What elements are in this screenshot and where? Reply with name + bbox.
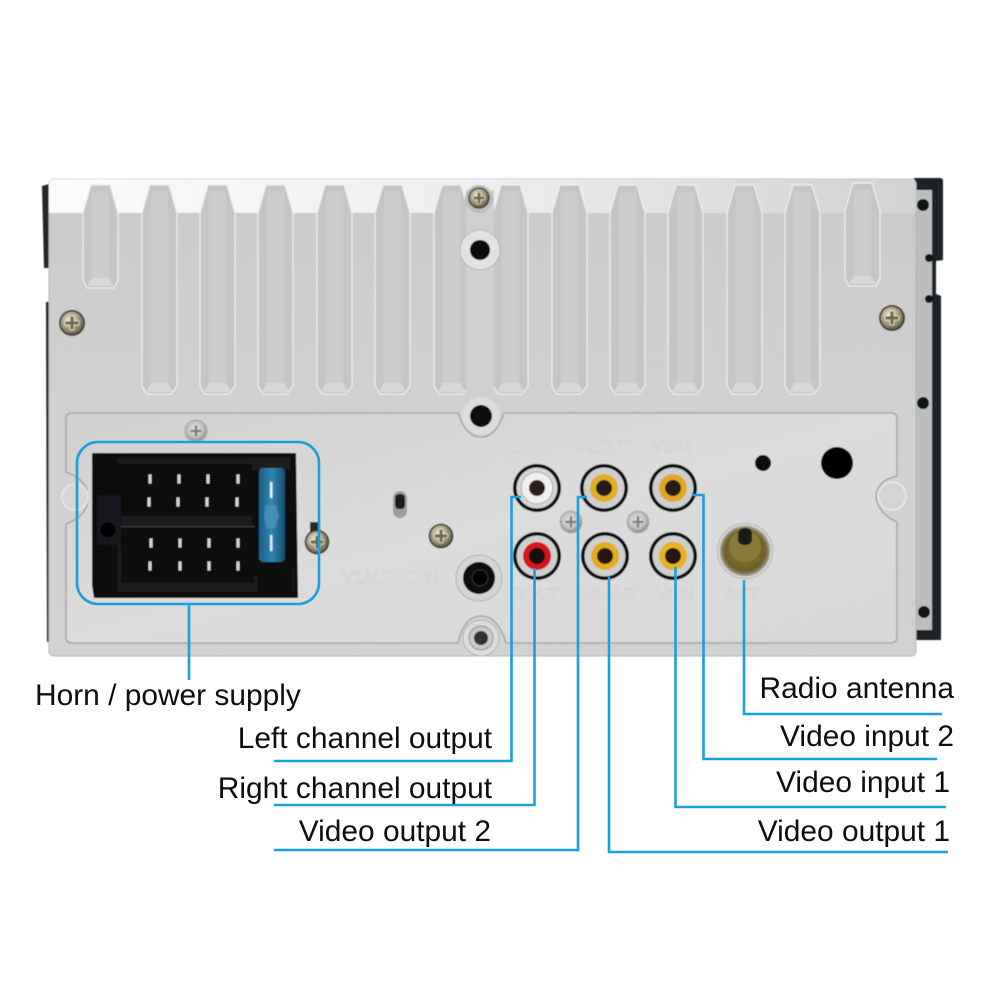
RCA jack: video output 1 yellow (581, 532, 629, 580)
RCA jack: right output red (513, 532, 561, 580)
cooling fins (83, 183, 880, 394)
leader: video output 2 (274, 497, 587, 850)
label: Video input 2: Video input 2 (780, 720, 954, 753)
right screw (879, 305, 905, 331)
RCA jack: left output white (513, 464, 561, 512)
faded silk-screen port labels (342, 437, 759, 604)
faded silk-screen port labels: V1IN (656, 585, 694, 604)
leader: right channel output (274, 568, 534, 805)
RCA jack: video output 2 yellow (580, 464, 628, 512)
leader: video input 1 (676, 567, 946, 807)
left tab (62, 484, 88, 510)
faded silk-screen port labels: V2OUT (575, 437, 632, 456)
label: Video output 2: Video output 2 (299, 815, 491, 848)
antenna socket (717, 523, 773, 579)
connector pins (148, 474, 240, 570)
faded silk-screen port labels: V2IN (652, 437, 690, 456)
main metal panel (49, 179, 916, 656)
left black chassis edge (42, 184, 50, 642)
small hole (755, 455, 771, 471)
RCA jack: video input 1 yellow (649, 532, 697, 580)
bottom mount (463, 620, 499, 656)
aux jack (456, 555, 502, 601)
right chassis side strip (914, 178, 943, 640)
left screw (59, 310, 85, 336)
photo: rear of car stereo (42, 178, 943, 656)
top centre screw (468, 187, 490, 209)
side connector screw (305, 522, 329, 554)
label: Horn / power supply: Horn / power supply (35, 679, 301, 712)
small screws between jacks (560, 510, 650, 534)
RCA jack: video input 2 yellow (649, 464, 697, 512)
faded silk-screen port labels: ANT (725, 585, 759, 604)
label: Video output 1: Video output 1 (758, 815, 950, 848)
label: Video input 1: Video input 1 (776, 766, 950, 799)
leader line: horn (188, 604, 190, 680)
label: Right channel output: Right channel output (218, 772, 493, 805)
callout frame: horn / power supply (77, 442, 319, 680)
faded silk-screen port labels: LOUT (510, 437, 555, 456)
leader: video input 2 (692, 495, 937, 759)
faded silk-screen port labels: ROUT (512, 585, 560, 604)
connector screw top (184, 420, 208, 442)
label: Radio antenna: Radio antenna (760, 672, 954, 705)
leader: left channel output (274, 497, 521, 761)
lower inset plate (66, 413, 897, 643)
large hole (821, 447, 853, 479)
boss and mounting hole (460, 185, 500, 395)
right tab (878, 482, 906, 510)
faded silk-screen port labels: V1OUT (582, 585, 639, 604)
slot (393, 491, 407, 518)
blue fuse (259, 468, 285, 562)
label: Left channel output: Left channel output (238, 722, 493, 755)
leader: video output 1 (609, 577, 948, 852)
black wiring connector (92, 452, 298, 598)
centre small screw (429, 524, 453, 548)
faded silk-screen port labels: V1AUDIO IN (342, 568, 438, 587)
leader: radio antenna (744, 580, 942, 714)
centre hole (462, 397, 500, 435)
